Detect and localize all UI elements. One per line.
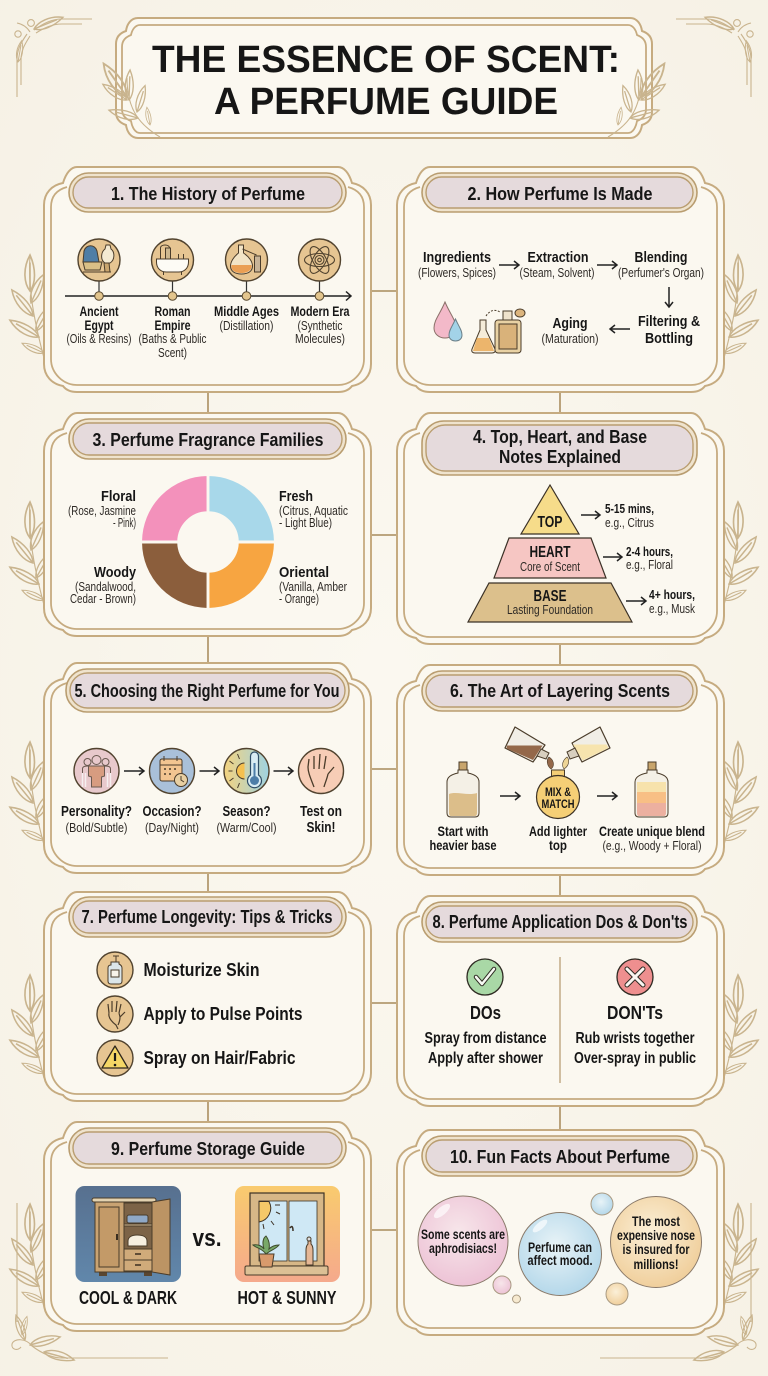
choice labels: Season?	[222, 803, 270, 820]
layering arrows	[500, 792, 617, 800]
heading: storage: 9. Perfume Storage Guide	[111, 1139, 305, 1159]
dos list: Apply after shower	[428, 1050, 543, 1067]
heading: choosing	[66, 669, 349, 712]
dos list: Spray from distance	[424, 1030, 547, 1047]
connector lines between panels	[208, 291, 560, 1230]
heading: fun facts: 10. Fun Facts About Perfume	[450, 1147, 670, 1167]
layering labels: Start with	[438, 824, 488, 839]
panel 6: layering scents	[397, 665, 724, 875]
corner ornament: bottom right	[600, 1203, 756, 1364]
process steps: Bottling	[645, 330, 693, 347]
icon: roman bath	[152, 239, 194, 281]
choice labels: Test on	[300, 803, 342, 820]
don'ts list: Rub wrists together	[576, 1030, 694, 1047]
icon: pulse hand	[97, 996, 133, 1032]
pyramid labels: HEART	[530, 544, 571, 561]
process steps: Ingredients	[423, 249, 491, 266]
choice labels: (Warm/Cool)	[216, 821, 276, 835]
pyramid labels: BASE	[534, 588, 567, 605]
panel 8: dos and don'ts	[397, 896, 724, 1106]
title text	[152, 39, 620, 123]
timeline labels: Empire	[154, 318, 191, 333]
title sprig right	[608, 61, 669, 137]
donut labels: - Orange)	[279, 592, 319, 606]
choice labels: (Day/Night)	[145, 821, 199, 835]
panel 4: notes explained	[397, 413, 724, 644]
timeline labels: (Baths & Public	[138, 332, 206, 346]
bubble: insured nose	[610, 1196, 702, 1288]
timeline labels: Molecules)	[295, 332, 345, 346]
icon: ancient egypt	[78, 239, 120, 281]
note durations: 5-15 mins,	[605, 502, 654, 516]
storage labels: HOT & SUNNY	[238, 1287, 337, 1308]
process steps: (Maturation)	[542, 332, 598, 346]
heading: choosing: 5. Choosing the Right Perfume for You	[74, 681, 340, 701]
panel 5: choosing perfume	[44, 663, 371, 873]
timeline labels: Egypt	[84, 318, 114, 333]
timeline	[65, 281, 351, 300]
flow arrows	[124, 767, 293, 775]
don'ts list: DON'Ts	[607, 1003, 663, 1023]
timeline labels: Roman	[154, 304, 190, 319]
heading: notes: 4. Top, Heart, and Base	[473, 427, 647, 447]
panel 3: fragrance families	[44, 413, 371, 636]
icon: final blend bottle	[635, 762, 668, 817]
donut labels: Oriental	[279, 564, 329, 581]
small bubbles	[493, 1193, 628, 1305]
heading: history: 1. The History of Perfume	[111, 184, 305, 204]
vs label: vs.	[192, 1225, 222, 1252]
bubble: aphrodisiacs: aphrodisiacs!	[429, 1241, 497, 1256]
note durations: e.g., Citrus	[605, 516, 654, 530]
longevity tips	[144, 959, 302, 1068]
choice labels	[61, 803, 342, 836]
process steps: (Perfumer's Organ)	[618, 266, 704, 280]
bubble: mood: Perfume can	[528, 1240, 592, 1255]
pyramid labels: Lasting Foundation	[507, 603, 593, 617]
icon: mix and match flask: MIX &	[545, 787, 571, 799]
icon: atom	[298, 239, 340, 281]
bubble: aphrodisiacs	[418, 1196, 508, 1286]
timeline labels: (Distillation)	[220, 319, 274, 333]
icon: mix and match flask	[536, 770, 580, 818]
process steps: (Steam, Solvent)	[520, 266, 594, 280]
corner ornament: top left	[15, 13, 92, 97]
choice labels: (Bold/Subtle)	[66, 821, 128, 835]
process steps	[418, 249, 704, 347]
heading: longevity	[69, 897, 346, 937]
donut labels: (Rose, Jasmine	[68, 504, 136, 518]
icon: pouring bottle brown	[505, 727, 553, 769]
donut labels: Cedar - Brown)	[70, 592, 136, 606]
process arrows	[499, 261, 673, 333]
panel 7: longevity	[44, 892, 371, 1101]
donut labels: (Citrus, Aquatic	[279, 504, 348, 518]
divider	[559, 957, 561, 1083]
note durations: e.g., Floral	[626, 558, 673, 572]
note durations	[605, 502, 696, 616]
heading: families	[69, 419, 346, 459]
process steps: Extraction	[528, 249, 588, 266]
pyramid labels	[507, 514, 593, 617]
heading: layering: 6. The Art of Layering Scents	[450, 681, 670, 701]
layering labels: (e.g., Woody + Floral)	[602, 839, 702, 853]
donut labels: Woody	[94, 564, 137, 581]
icon: hand	[298, 748, 344, 794]
donut labels	[68, 488, 348, 606]
panel 1: history of perfume	[44, 167, 371, 392]
note durations: 2-4 hours,	[626, 545, 673, 559]
pyramid labels: Core of Scent	[520, 560, 580, 574]
icon: lotion	[97, 952, 133, 988]
note durations: 4+ hours,	[649, 588, 695, 602]
icon: cross	[617, 959, 653, 995]
timeline labels	[66, 304, 350, 360]
process steps: Blending	[634, 249, 688, 266]
storage labels	[79, 1287, 337, 1308]
heading: how made: 2. How Perfume Is Made	[468, 184, 652, 204]
bubble: insured nose: millions!	[634, 1257, 678, 1272]
timeline labels: Middle Ages	[214, 304, 279, 319]
process steps: (Flowers, Spices)	[418, 266, 496, 280]
layering labels: Add lighter	[529, 824, 588, 839]
layering labels: Create unique blend	[599, 824, 705, 839]
panel 9: storage guide	[44, 1122, 371, 1331]
donut labels: - Pink)	[113, 516, 136, 530]
title banner	[116, 18, 652, 138]
icon: drops	[434, 302, 462, 341]
longevity tips: Moisturize Skin	[144, 959, 260, 980]
pyramid arrows	[581, 511, 646, 605]
icon: distillation flask	[226, 239, 268, 281]
icon: mix and match flask: MATCH	[542, 799, 574, 811]
corner ornament: top right	[676, 13, 753, 97]
choice labels: Occasion?	[142, 803, 202, 820]
longevity tips: Apply to Pulse Points	[144, 1003, 302, 1024]
timeline labels: (Oils & Resins)	[66, 332, 132, 346]
layering labels: top	[549, 838, 567, 853]
donut chart	[141, 475, 275, 609]
donut labels: (Sandalwood,	[75, 580, 136, 594]
pyramid	[468, 485, 632, 622]
icon: warning	[97, 1040, 133, 1076]
longevity tips: Spray on Hair/Fabric	[144, 1047, 296, 1068]
storage labels: COOL & DARK	[79, 1287, 177, 1308]
icon: pouring bottle yellow	[563, 727, 610, 769]
bubble: mood: affect mood.	[528, 1253, 592, 1268]
process steps: Filtering &	[638, 313, 700, 330]
heading: how made	[422, 173, 697, 212]
don'ts list	[574, 1003, 696, 1067]
donut labels: - Light Blue)	[279, 516, 332, 530]
illustration: sunny window	[235, 1186, 340, 1282]
donut labels: Fresh	[279, 488, 313, 505]
side sprigs right	[714, 255, 760, 1307]
layering labels	[430, 824, 705, 853]
dos list: DOs	[470, 1003, 501, 1023]
heading: storage	[69, 1128, 346, 1168]
title text: A PERFUME GUIDE	[214, 81, 558, 123]
process steps: Aging	[552, 315, 588, 332]
side sprigs left	[8, 255, 54, 1307]
panel 2: how perfume is made	[397, 167, 724, 392]
heading: history	[69, 173, 346, 212]
timeline labels: Scent)	[158, 346, 187, 360]
bubble: insured nose: The most	[632, 1214, 680, 1229]
icon: personality	[74, 748, 119, 794]
layering labels: heavier base	[430, 838, 497, 853]
bubble: insured nose: is insured for	[622, 1242, 690, 1257]
icon: calendar	[150, 748, 194, 794]
choice labels: Personality?	[61, 803, 132, 820]
heading: families: 3. Perfume Fragrance Families	[92, 430, 324, 450]
corner ornament: bottom left	[12, 1203, 168, 1364]
pyramid labels: TOP	[538, 514, 563, 531]
heading: notes	[422, 421, 697, 475]
choice labels: Skin!	[306, 819, 336, 836]
heading: notes: Notes Explained	[499, 447, 621, 467]
bubble: mood	[518, 1212, 602, 1296]
title text: THE ESSENCE OF SCENT:	[152, 39, 620, 81]
icon: base bottle	[447, 762, 479, 817]
icon: check	[467, 959, 503, 995]
heading: fun facts	[422, 1136, 697, 1176]
timeline labels: Ancient	[80, 304, 119, 319]
panel 10: fun facts	[397, 1130, 724, 1335]
don'ts list: Over-spray in public	[574, 1050, 696, 1067]
title sprig left	[99, 61, 160, 137]
icon: season	[224, 748, 269, 794]
timeline labels: (Synthetic	[298, 319, 342, 333]
donut labels: (Vanilla, Amber	[279, 580, 347, 594]
icon: flask and bottle	[472, 309, 525, 353]
illustration: wardrobe	[76, 1186, 181, 1282]
timeline labels: Modern Era	[290, 304, 350, 319]
heading: dos and don'ts	[422, 902, 697, 942]
bubble: aphrodisiacs: Some scents are	[421, 1227, 505, 1242]
note durations: e.g., Musk	[649, 602, 696, 616]
heading: dos and don'ts: 8. Perfume Application Dos & Don'ts	[432, 912, 688, 932]
heading: longevity: 7. Perfume Longevity: Tips & Tricks	[82, 907, 332, 927]
donut labels: Floral	[101, 488, 136, 505]
heading: layering	[422, 671, 697, 711]
dos list	[424, 1003, 547, 1067]
bubble: insured nose: expensive nose	[617, 1228, 695, 1243]
